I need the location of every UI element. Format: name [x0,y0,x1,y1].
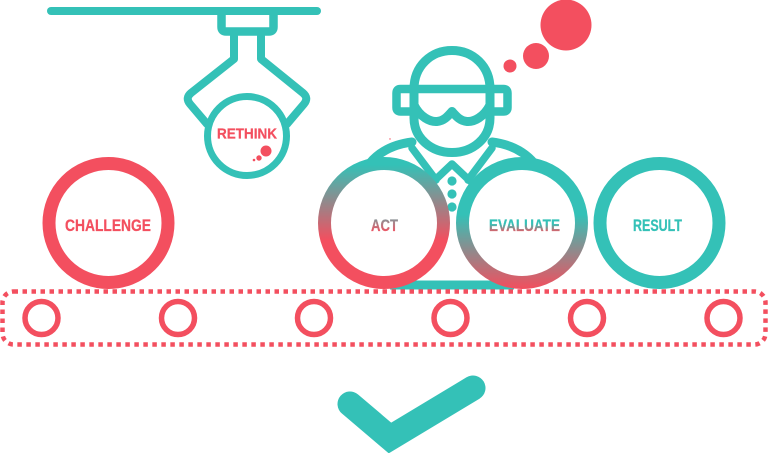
step: challenge [49,164,168,282]
claw ball: rethink [208,96,286,176]
small thought dots [253,146,272,161]
base under worker [390,280,514,290]
claw mount [222,14,274,32]
shirt buttons [447,176,457,212]
goggle lens [414,105,490,122]
step: act: ACT [371,217,398,235]
conveyor wheels [25,302,740,334]
step: challenge: CHALLENGE [65,217,151,235]
rethink label: RETHINK [217,126,277,142]
step: evaluate: EVALUATE [489,217,560,235]
step: result [600,164,719,282]
collar lines [412,148,492,181]
shoulders and collar [370,142,534,163]
step: result: RESULT [633,217,682,235]
step: act [324,164,444,282]
worker figure [370,50,534,290]
head [414,50,490,152]
speck [389,138,391,140]
conveyor belt [2,292,766,344]
check mark [350,388,473,438]
robotic claw [51,11,317,176]
step: evaluate [462,164,582,282]
thought bubbles [504,0,592,72]
goggles band and ears [396,89,508,112]
overhead rail [51,7,317,15]
claw arms [188,36,306,124]
